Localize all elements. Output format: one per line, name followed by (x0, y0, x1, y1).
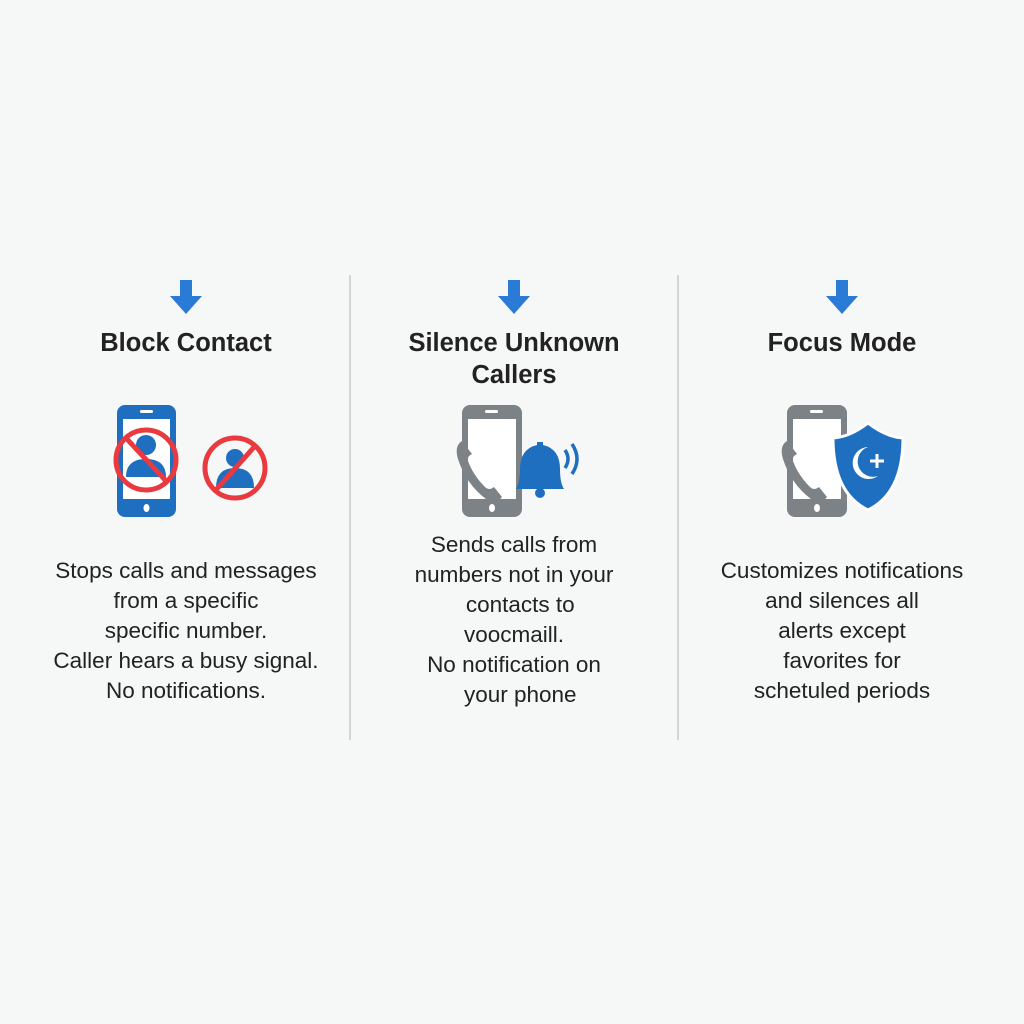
panel: focus mode (721, 280, 963, 703)
text: silence description: voocmaill. (464, 622, 564, 647)
text: silence description: your phone (464, 682, 577, 707)
heading (408, 329, 620, 389)
text: silence description (415, 532, 613, 707)
text: focus description: alerts except (778, 618, 906, 643)
heading: Block Contact (100, 329, 272, 357)
text: block description: Stops calls and messages (55, 558, 317, 583)
heading: Silence Unknown (408, 329, 620, 357)
icon: phone with shield (782, 405, 904, 517)
text: block description: from a specific (113, 588, 259, 613)
text: focus description: favorites for (783, 648, 901, 673)
text: silence description: contacts to (466, 592, 575, 617)
heading: Focus Mode (768, 329, 916, 357)
text: silence description: numbers not in your (415, 562, 613, 587)
text: silence description: No notification on (427, 652, 601, 677)
text: block description: Caller hears a busy signal. (53, 648, 319, 673)
text: focus description (721, 558, 963, 703)
text: focus description: schetuled periods (754, 678, 930, 703)
text: focus description: and silences all (765, 588, 919, 613)
text: focus description: Customizes notifications (721, 558, 963, 583)
icon: blocked contacts (114, 405, 268, 517)
arrow (170, 280, 202, 314)
panel: block contact (53, 280, 319, 703)
text: block description: No notifications. (106, 678, 266, 703)
icon: phone with bell (456, 405, 579, 517)
text: block description (53, 558, 319, 703)
text: block description: specific number. (105, 618, 267, 643)
arrow (826, 280, 858, 314)
panel: silence unknown callers (408, 280, 620, 707)
arrow (498, 280, 530, 314)
text: silence description: Sends calls from (431, 532, 597, 557)
heading: Callers (471, 361, 557, 389)
